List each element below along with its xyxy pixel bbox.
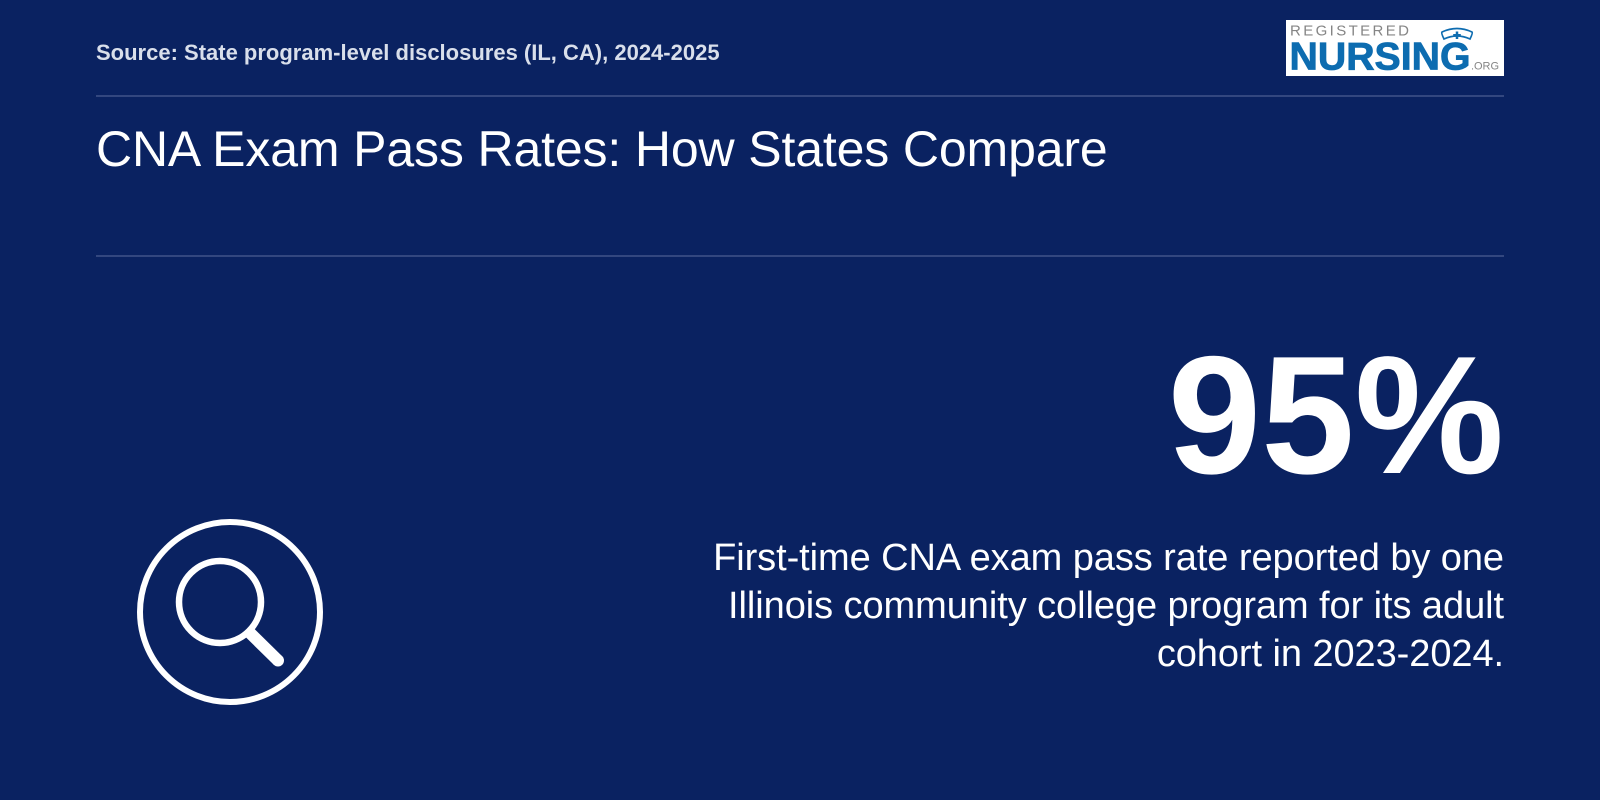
logo: RegisteredNursing.org: .ORG	[1471, 60, 1499, 72]
icon: magnifying glass in circle	[137, 519, 323, 705]
title: CNA Exam Pass Rates: How States Compare	[96, 121, 1108, 177]
logo: RegisteredNursing.org	[1286, 20, 1504, 76]
statistic description	[713, 537, 1504, 675]
statistic description: Illinois community college program for its adult	[728, 585, 1504, 627]
logo: RegisteredNursing.org: REGISTERED	[1290, 22, 1409, 40]
statistic description: cohort in 2023-2024.	[1157, 633, 1504, 675]
statistic description: First-time CNA exam pass rate reported by one	[713, 537, 1504, 579]
big statistic: 95%	[1168, 321, 1504, 509]
source line: Source: State program-level disclosures (IL, CA), 2024-2025	[96, 40, 720, 65]
